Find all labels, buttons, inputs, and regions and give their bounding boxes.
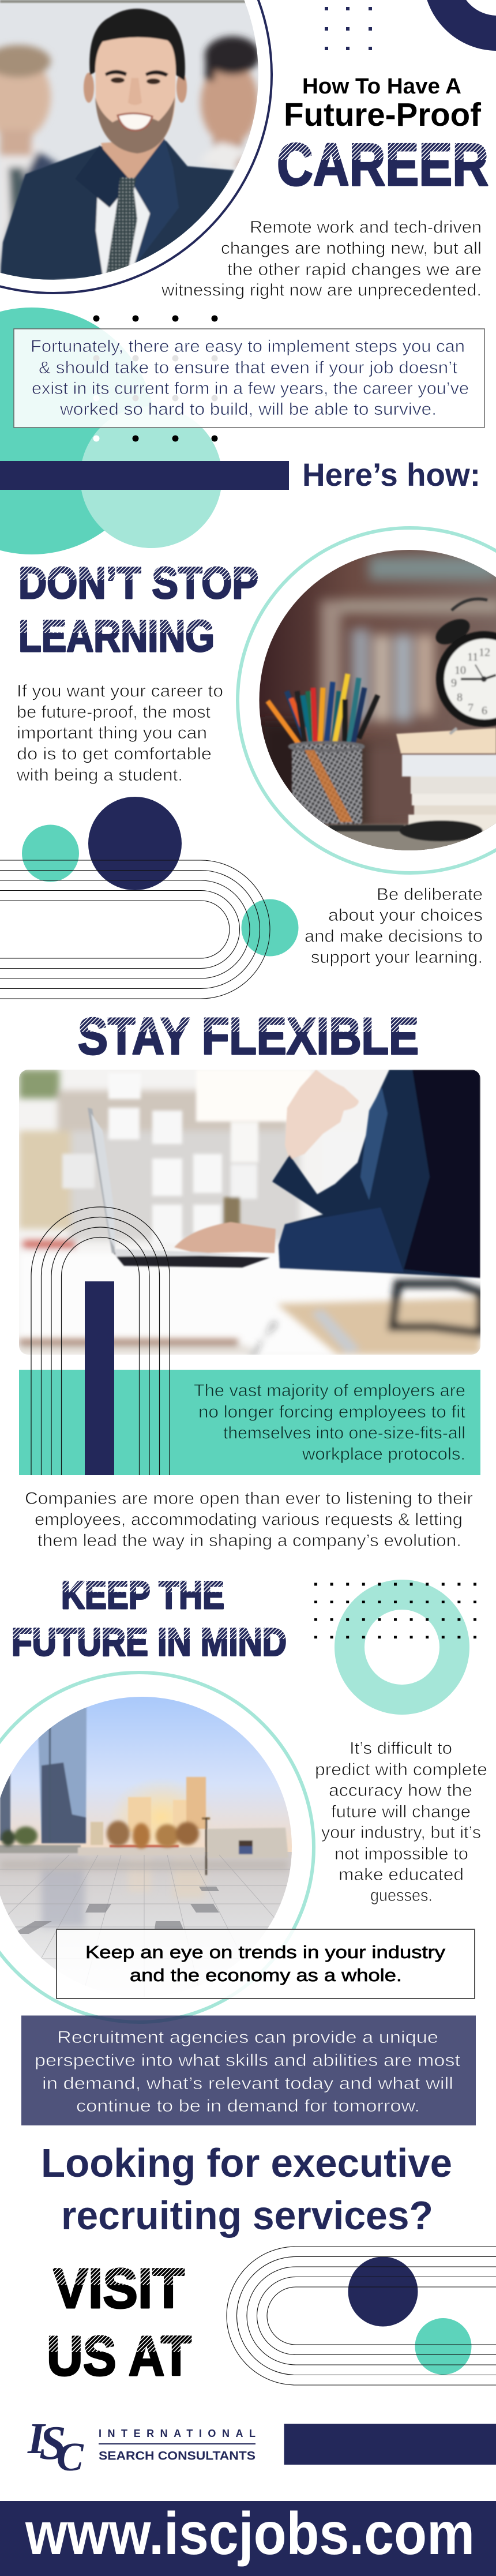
typing hand [174,1222,276,1253]
panel: call to action [0,2140,496,2576]
logo: international search consultants: S [39,2416,66,2470]
footer band [0,2501,496,2576]
decorative navy arc [441,0,496,33]
photo: man at laptop [19,1070,480,1356]
navy ring around photo [0,0,272,293]
photo: pencils and alarm clock: 7 [468,702,474,714]
concentric line stadium [227,2247,496,2385]
band text [194,1381,466,1464]
logo: international search consultants: SEARCH CONSULTANTS [99,2450,255,2462]
ground reflections [0,1858,288,1927]
heading: here's how: Here’s how: [302,456,480,493]
logo: international search consultants: I [27,2414,46,2463]
heading: KEEP THE [61,1573,224,1617]
magnifier [329,825,404,831]
heading [15,558,263,661]
dot grid [325,7,372,50]
cta heading: Looking for executive [41,2140,452,2185]
intro paragraph: If you want your career to [17,682,223,700]
band text: workplace protocols. [302,1445,465,1464]
heading: FUTURE IN MIND [12,1620,287,1664]
side paragraph: predict with complete [315,1760,487,1779]
intro text: witnessing right now are unprecedented. [161,280,482,300]
cta heading [41,2140,452,2238]
intro text: changes are nothing new, but all [221,239,482,258]
band text: no longer forcing employees to fit [198,1403,466,1422]
side paragraph: Be deliberate [377,885,483,904]
tile lines [0,1854,290,1959]
side paragraph [305,885,483,967]
square dot grid [314,1583,478,1638]
band text: themselves into one-size-fits-all [223,1424,465,1442]
light teal ring [350,1595,454,1700]
recruitment agencies text: perspective into what skills and abilities are most [35,2051,461,2070]
cup [292,744,362,824]
recruitment agencies text: in demand, what’s relevant today and what will [42,2074,453,2093]
heading [9,1573,290,1664]
callout text: worked so hard to build, will be able to survive. [59,400,437,419]
side paragraph: guesses. [370,1886,433,1905]
logo: international search consultants: C [57,2435,84,2480]
panel: stay flexible [19,1008,480,1550]
teal ring around photo [0,1673,314,2022]
trends callout text: and the economy as a whole. [130,1965,402,1985]
teal circle [415,2318,472,2375]
photo: pencils and alarm clock: 9 [451,677,457,689]
recruitment agencies box [21,2016,476,2125]
visit us at [44,2257,195,2387]
side paragraph: not impossible to [335,1844,468,1863]
title [275,74,491,198]
navy bar [0,461,289,490]
band text: The vast majority of employers are [194,1381,465,1400]
logo: international search consultants [27,2414,255,2480]
teal circle [0,308,155,554]
concentric line stadium [0,860,270,999]
intro paragraph: do is to get comfortable [17,744,212,764]
callout text [31,337,469,419]
panel: fortunately callout with circles [0,308,484,554]
laptop [88,1108,115,1253]
visit us at: US AT [47,2324,191,2387]
intro text [161,218,482,300]
recruitment agencies text: Recruitment agencies can provide a unique [57,2028,438,2047]
panel: don't stop learning [0,528,496,999]
navy vertical bar [85,1281,114,1475]
callout text: & should take to ensure that even if your job doesn’t [39,358,458,377]
title: Future-Proof [284,96,482,133]
recruitment agencies text: continue to be in demand for tomorrow. [76,2097,420,2116]
side paragraph [315,1739,487,1905]
clock [452,599,487,610]
logo: international search consultants: INTERNATIONAL [99,2428,255,2439]
teal circle right [241,899,299,957]
photo: pencils and alarm clock: 10 [454,664,466,677]
photo: pencils and alarm clock: 12 [479,646,490,659]
black dots [93,315,218,442]
trends callout text: Keep an eye on trends in your industry [85,1942,446,1962]
photo: pencils and alarm clock [254,545,496,857]
trends callout text [85,1942,446,1985]
side paragraph: make educated [339,1865,464,1884]
recruitment agencies text [35,2028,461,2116]
trends callout box [57,1929,475,1998]
teal band [19,1370,480,1475]
side paragraph: support your learning. [311,948,483,967]
navy circle [348,2257,418,2326]
heading: LEARNING [18,612,215,661]
suit body [272,1070,480,1278]
cta heading: recruiting services? [61,2193,433,2238]
heading: DON’T STOP [18,558,258,608]
photo: pencils and alarm clock: 8 [457,691,463,704]
intro paragraph [16,682,223,785]
photo: pencils and alarm clock: 11 [467,651,478,663]
companies paragraph: employees, accommodating various requests & letting [35,1510,463,1529]
arch lines [31,1207,170,1475]
heading: STAY FLEXIBLE [78,1008,419,1066]
callout text: Fortunately, there are easy to implement steps you can [31,337,465,356]
companies paragraph: Companies are more open than ever to listening to their [25,1489,473,1508]
photo: smiling businessman with colleagues [0,0,277,288]
side paragraph: future will change [331,1802,471,1821]
photo: city plaza at sunset [0,1697,292,1988]
side paragraph: your industry, but it’s [321,1823,481,1842]
teal circle small [22,825,79,882]
side paragraph: and make decisions to [305,927,483,946]
intro text: Remote work and tech-driven [250,218,482,237]
hand on chin [285,1070,359,1160]
ring around photo [238,528,496,873]
pencils [265,673,381,745]
panel: keep the future in mind [0,1573,487,2125]
companies paragraph [25,1489,473,1550]
companies paragraph: them lead the way in shaping a company’s evolution. [37,1531,461,1550]
side paragraph: It’s difficult to [350,1739,452,1758]
light teal circle [80,406,222,548]
callout box [14,329,484,428]
visit us at: VISIT [53,2257,185,2320]
photo: pencils and alarm clock: 6 [482,704,487,717]
intro paragraph: important thing you can [17,723,207,743]
books [396,728,496,753]
intro paragraph: with being a student. [16,766,183,785]
side paragraph: accuracy how the [329,1781,472,1800]
navy circle [88,797,182,890]
title: How To Have A [302,74,461,99]
intro text: the other rapid changes we are [227,260,482,279]
intro paragraph: be future-proof, the most [17,703,211,722]
navy bar [284,2424,496,2465]
callout text: exist in its current form in a few years, the career you’ve [32,379,469,398]
panel: header [0,0,496,300]
side paragraph: about your choices [328,906,483,925]
